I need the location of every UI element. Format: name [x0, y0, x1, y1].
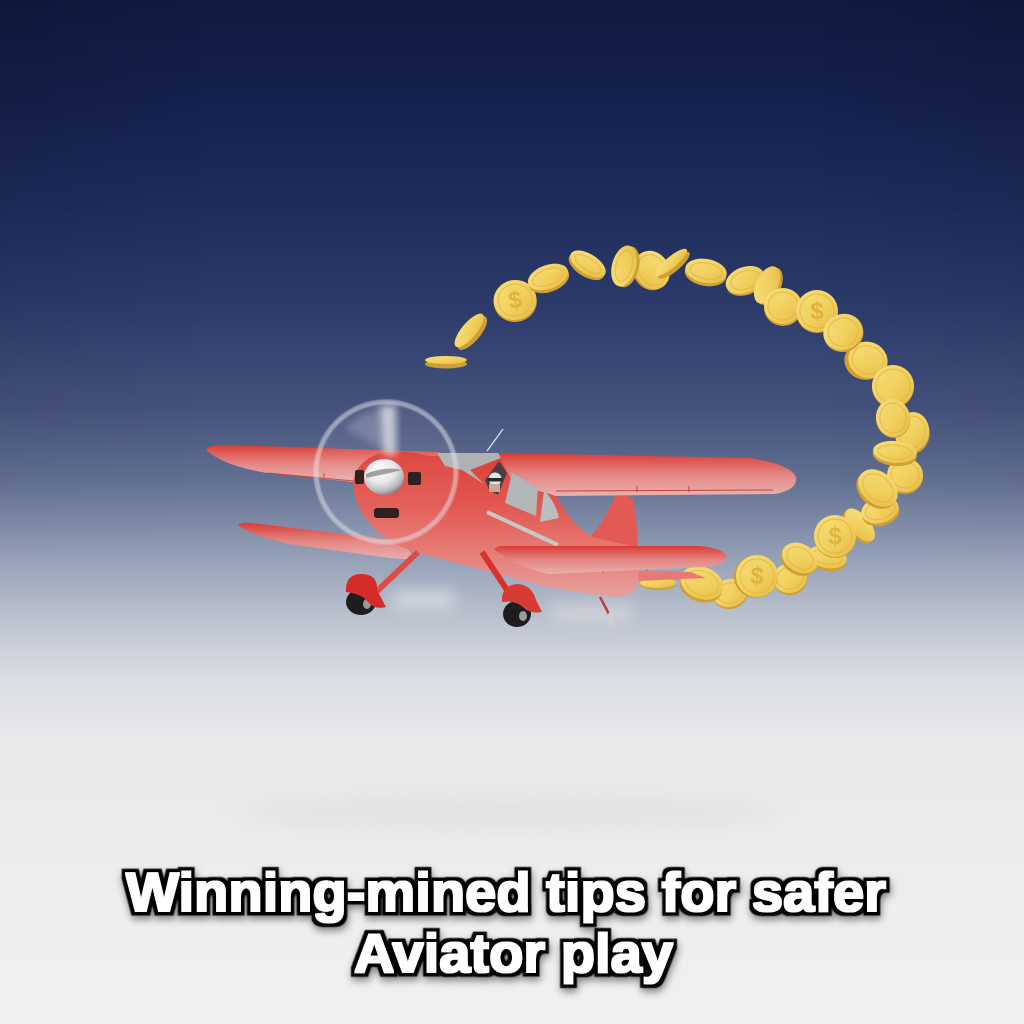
title: Winning-mined tips for safer: [126, 861, 886, 923]
red biplane: [206, 402, 796, 627]
chrome spinner: [364, 459, 404, 495]
upper right wing: [498, 453, 796, 496]
coin trail loop: $: [749, 562, 765, 591]
wing control lines: [267, 473, 773, 573]
pilot: [485, 461, 507, 495]
lower right wing: [495, 546, 727, 574]
fuselage stripe: [487, 512, 558, 545]
title: Aviator play: [354, 922, 673, 984]
engine cowling vents: [355, 470, 421, 518]
fuselage: [353, 451, 640, 597]
windshield: [437, 453, 501, 484]
coin trail loop: [425, 243, 933, 613]
upper left wing: [206, 445, 440, 482]
tail wheel: [600, 597, 615, 626]
title: [126, 861, 886, 984]
right landing strut and wheel: [482, 552, 542, 627]
ground shadow: [240, 798, 780, 826]
smoke puffs under plane: [392, 590, 634, 623]
left landing strut and wheel: [346, 552, 418, 615]
rear window: [540, 490, 559, 522]
rear stabilizer: [618, 570, 706, 581]
lower left wing: [238, 523, 416, 560]
antenna: [487, 429, 503, 451]
coin trail loop: $: [506, 286, 525, 315]
tail fin: [591, 495, 638, 552]
spinning propeller disc: [316, 402, 456, 542]
coin trail loop: $: [810, 298, 824, 325]
coin trail loop: $: [828, 523, 842, 550]
side window: [505, 473, 538, 516]
